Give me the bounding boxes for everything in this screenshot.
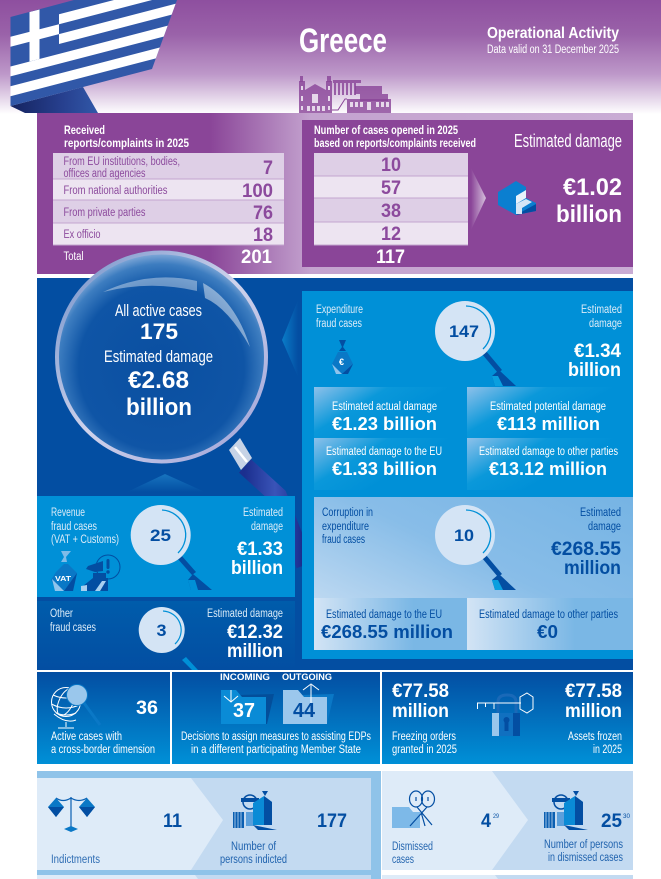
right table: cases opened: [314, 125, 476, 268]
arrow: left to main lens: [282, 300, 298, 377]
left table: received reports: Total: [64, 251, 84, 263]
text: all active cases: All active cases: [115, 301, 202, 320]
right table: cases opened: based on reports/complaints received: [314, 138, 476, 150]
left table: received reports: Received: [64, 125, 105, 137]
arrow: up to main lens: [127, 474, 205, 492]
sub-panel: potential damage: [467, 387, 633, 438]
sub-panel: damage to the EU: [314, 438, 467, 490]
right table: cases opened: 38: [381, 201, 401, 222]
panel: corruption in expenditure fraud: damage: [588, 521, 621, 533]
panel: blue main area: [37, 278, 633, 670]
icon: magnifier 3: 3: [156, 621, 166, 640]
right table: cases opened: 57: [381, 178, 401, 199]
panel: other fraud cases: Estimated damage: [207, 608, 283, 620]
right table: cases opened: 117: [376, 247, 405, 268]
panel: indictments: Number of: [231, 841, 277, 853]
panel: corruption in expenditure fraud: expenditure: [322, 521, 369, 533]
estimated damage callout: [514, 131, 622, 228]
subtitle: operational activity: Data valid on 31 December 2025: [487, 44, 619, 56]
panel: decisions to assign measures: [172, 672, 380, 764]
icon: magnifier 3: [139, 607, 198, 670]
sub-panel: actual damage: [314, 387, 467, 438]
panel: freezing orders and assets frozen: €77.58: [392, 681, 449, 702]
panel: revenue fraud cases: billion: [231, 558, 283, 579]
icon: outgoing folder: 44: [293, 700, 316, 722]
panel: freezing orders and assets frozen: million: [565, 701, 622, 722]
left table: received reports: From national authorities: [64, 185, 168, 197]
left table: received reports: 18: [253, 225, 273, 246]
sub-panel: corruption damage to other parties: €0: [537, 622, 558, 642]
panel: dismissed cases: 30: [623, 814, 631, 820]
panel: corruption in expenditure fraud: fraud cases: [322, 534, 365, 546]
icon: VAT bag: VAT: [55, 574, 71, 583]
panel: indictments: Indictments: [51, 854, 100, 866]
panel: indictments: 11: [163, 811, 182, 832]
panel: revenue fraud cases: fraud cases: [51, 521, 97, 533]
left table: received reports: 7: [263, 158, 273, 179]
left table: received reports: Ex officio: [64, 229, 100, 241]
panel: revenue fraud cases: damage: [251, 521, 283, 533]
arrow: cases to damage: [471, 168, 486, 230]
panel: dismissed cases: 4: [481, 811, 491, 832]
icon: magnifier 10: [435, 505, 516, 590]
panel: cross-border cases: 36: [136, 698, 158, 719]
icon: magnifier 10: 10: [454, 526, 474, 545]
icon: scales: [48, 797, 95, 832]
left table: received reports: 76: [253, 203, 273, 224]
icon: euro bag: €: [339, 357, 344, 367]
text: all active cases: [104, 301, 213, 421]
panel: other fraud cases: million: [227, 641, 283, 662]
sub-panel: corruption damage to the EU: €268.55 million: [321, 622, 453, 642]
sub-panel: actual damage: Estimated actual damage: [332, 401, 437, 413]
panel: corruption in expenditure fraud: €268.55: [551, 539, 621, 560]
panel: other fraud cases: fraud cases: [50, 622, 96, 634]
sub-panel: potential damage: €113 million: [497, 414, 600, 434]
panel: dismissed cases: Dismissed: [392, 841, 433, 853]
panel: decisions to assign measures: INCOMING: [220, 672, 270, 682]
subtitle: operational activity: [487, 25, 619, 56]
icon: incoming folder: [221, 690, 274, 724]
sub-panel: potential damage: Estimated potential damage: [490, 401, 606, 413]
left table: received reports: offices and agencies: [64, 168, 146, 180]
panel: freezing orders and assets frozen: €77.58: [565, 681, 622, 702]
icon: key and padlock: [477, 693, 533, 736]
right table: cases opened: 10: [381, 155, 401, 176]
panel: corruption in expenditure fraud: Estimated: [580, 507, 621, 519]
icon: magnifier 147: 147: [449, 322, 479, 341]
panel: dismissed cases: cases: [392, 854, 414, 866]
panel: dismissed cases: [382, 771, 633, 879]
panel: corruption in expenditure fraud: [314, 497, 633, 650]
panel: received reports and cases opened: [37, 113, 633, 274]
icon: magnifier 25: [131, 505, 212, 590]
text: all active cases: Estimated damage: [104, 347, 213, 366]
panel: decisions to assign measures: in a different participating Member State: [191, 744, 361, 756]
panel: revenue fraud cases: €1.33: [237, 539, 283, 560]
panel: revenue fraud cases: [37, 496, 295, 597]
panel: indictments: persons indicted: [220, 854, 287, 866]
panel: other fraud cases: €12.32: [227, 622, 283, 643]
panel: decisions to assign measures: Decisions to assign measures to assisting EDPs: [181, 731, 371, 743]
text: all active cases: 175: [140, 319, 178, 344]
sub-panel: corruption damage to other parties: Estimated damage to other parties: [479, 609, 618, 621]
panel: freezing orders and assets frozen: Freezing orders: [392, 731, 456, 743]
panel: expenditure fraud: fraud cases: [316, 318, 362, 330]
panel: revenue fraud cases: Revenue: [51, 507, 85, 519]
panel: revenue fraud cases: Estimated: [243, 507, 283, 519]
panel: dismissed cases: 25: [601, 811, 622, 832]
text: all active cases: €2.68: [128, 367, 189, 394]
sub-panel: damage to the EU: Estimated damage to the EU: [326, 446, 442, 458]
panel: cross-border cases: Active cases with: [51, 731, 122, 743]
panel: corruption in expenditure fraud: million: [564, 558, 621, 579]
estimated damage callout: Estimated damage: [514, 131, 622, 151]
icon: scissors and folder: [392, 791, 434, 828]
icon: VAT bag: [51, 551, 77, 591]
icon: customs officer: [81, 555, 120, 591]
panel: other fraud cases: Other: [50, 608, 73, 620]
left table: received reports: From EU institutions, bodies,: [64, 156, 180, 168]
left table: received reports: reports/complaints in 2025: [64, 138, 190, 150]
left table: received reports: 100: [242, 181, 273, 202]
icon: incoming folder: 37: [233, 700, 255, 722]
panel: freezing orders and assets frozen: [382, 672, 633, 764]
panel: freezing orders and assets frozen: Assets frozen: [568, 731, 622, 743]
panel: expenditure fraud: Expenditure: [316, 304, 363, 316]
panel: freezing orders and assets frozen: in 2025: [593, 744, 622, 756]
sub-panel: damage to other parties: [467, 438, 633, 490]
panel: decisions to assign measures: OUTGOING: [282, 672, 332, 682]
sub-panel: damage to other parties: Estimated damage to other parties: [479, 446, 618, 458]
panel: expenditure fraud: damage: [589, 318, 622, 330]
panel: other fraud cases: [37, 601, 295, 670]
left table: received reports: 201: [241, 247, 272, 268]
icon: magnifier 147: [435, 301, 516, 386]
panel: expenditure fraud: billion: [568, 360, 621, 381]
panel: indictments: 177: [317, 811, 347, 832]
sub-panel: corruption damage to the EU: [314, 598, 467, 650]
panel: corruption in expenditure fraud: Corruption in: [322, 507, 373, 519]
right table: cases opened: 12: [381, 224, 401, 245]
estimated damage callout: billion: [556, 201, 622, 228]
panel: dismissed cases: 29: [493, 814, 500, 820]
icon: Greek flag ribbon: [10, 0, 177, 113]
icon: money stacks: [498, 181, 536, 215]
icon: Athens buildings: [299, 76, 391, 113]
icon: globe with magnifier: [52, 684, 100, 728]
right table: cases opened: Number of cases opened in 2025: [314, 125, 458, 137]
panel: expenditure fraud: [302, 291, 633, 659]
estimated damage callout: €1.02: [563, 174, 622, 201]
panel: cross-border cases: a cross-border dimension: [51, 744, 155, 756]
panel: revenue fraud cases: (VAT + Customs): [51, 534, 119, 546]
header background: [0, 0, 661, 114]
panel: expenditure fraud: Estimated: [581, 304, 622, 316]
panel: freezing orders and assets frozen: million: [392, 701, 449, 722]
icon: outgoing folder: [283, 684, 334, 724]
panel: cross-border cases: [37, 672, 170, 764]
left table: received reports: From private parties: [64, 207, 146, 219]
panel: indictments: [37, 771, 381, 879]
panel: expenditure fraud: €1.34: [574, 341, 621, 362]
icon: big magnifying glass: [57, 252, 305, 565]
icon: person with evidence: [233, 791, 277, 830]
icon: person with evidence: [544, 791, 588, 830]
subtitle: operational activity: Operational Activity: [487, 25, 619, 42]
title: Greece: [299, 22, 387, 60]
sub-panel: corruption damage to other parties: [467, 598, 633, 650]
text: all active cases: billion: [126, 394, 192, 421]
sub-panel: actual damage: €1.23 billion: [332, 414, 437, 434]
icon: euro bag: [332, 340, 353, 374]
panel: freezing orders and assets frozen: granted in 2025: [392, 744, 457, 756]
sub-panel: corruption damage to the EU: Estimated damage to the EU: [326, 609, 442, 621]
sub-panel: damage to the EU: €1.33 billion: [332, 459, 437, 479]
panel: dismissed cases: in dismissed cases: [548, 852, 623, 864]
panel: dismissed cases: Number of persons: [544, 839, 623, 851]
sub-panel: damage to other parties: €13.12 million: [489, 459, 607, 479]
icon: magnifier 25: 25: [150, 526, 171, 545]
left table: received reports: [53, 125, 284, 268]
